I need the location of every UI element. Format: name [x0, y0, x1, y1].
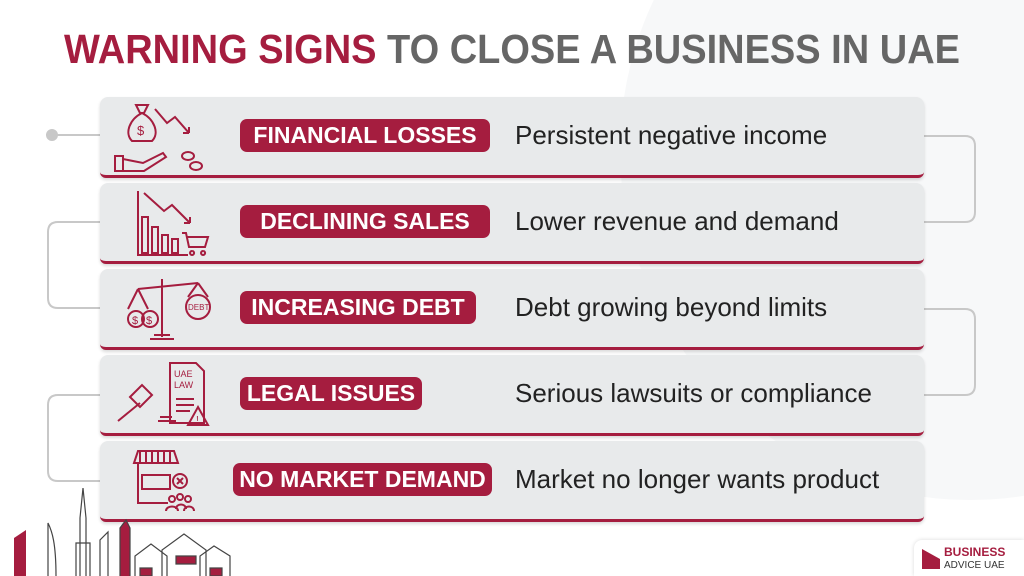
icon: scale money vs debt: $: [146, 315, 152, 327]
card: financial losses: [100, 97, 924, 178]
icon: gavel and law document: LAW: [174, 380, 194, 390]
icon: gavel and law document: !: [196, 415, 199, 426]
icon: scale money vs debt: DEBT: [188, 303, 209, 312]
description: Debt growing beyond limits: [515, 292, 827, 322]
logo: business advice uae: [914, 540, 1024, 576]
description: Market no longer wants product: [515, 464, 879, 494]
icon: money bag and hand: $: [137, 123, 145, 138]
description: Persistent negative income: [515, 120, 827, 150]
icon: shop with x and people: [132, 450, 195, 511]
card: legal issues: [100, 355, 924, 436]
background blob: [620, 0, 1024, 500]
badge: DECLINING SALES: [260, 208, 470, 234]
icon: scale money vs debt: [127, 279, 211, 340]
badge: LEGAL ISSUES: [247, 380, 415, 406]
icon: gavel and law document: [117, 362, 210, 426]
card: declining sales: [100, 183, 924, 264]
skyline illustration: [14, 488, 231, 576]
description: Serious lawsuits or compliance: [515, 378, 872, 408]
icon: falling chart with cart: [137, 191, 210, 256]
icon: gavel and law document: UAE: [174, 369, 193, 379]
icon: money bag and hand: [114, 104, 203, 172]
badge: [240, 205, 490, 238]
logo: business advice uae: ADVICE UAE: [944, 560, 1005, 571]
badge: INCREASING DEBT: [251, 294, 465, 320]
card: increasing debt: [100, 269, 924, 350]
title: WARNING SIGNS TO CLOSE A BUSINESS IN UAE: [64, 26, 960, 72]
card: no market demand: [100, 441, 924, 522]
logo: business advice uae: BUSINESS: [944, 545, 1005, 559]
badge: FINANCIAL LOSSES: [253, 122, 477, 148]
icon: scale money vs debt: $: [132, 315, 138, 327]
description: Lower revenue and demand: [515, 206, 839, 236]
badge: NO MARKET DEMAND: [239, 466, 486, 492]
